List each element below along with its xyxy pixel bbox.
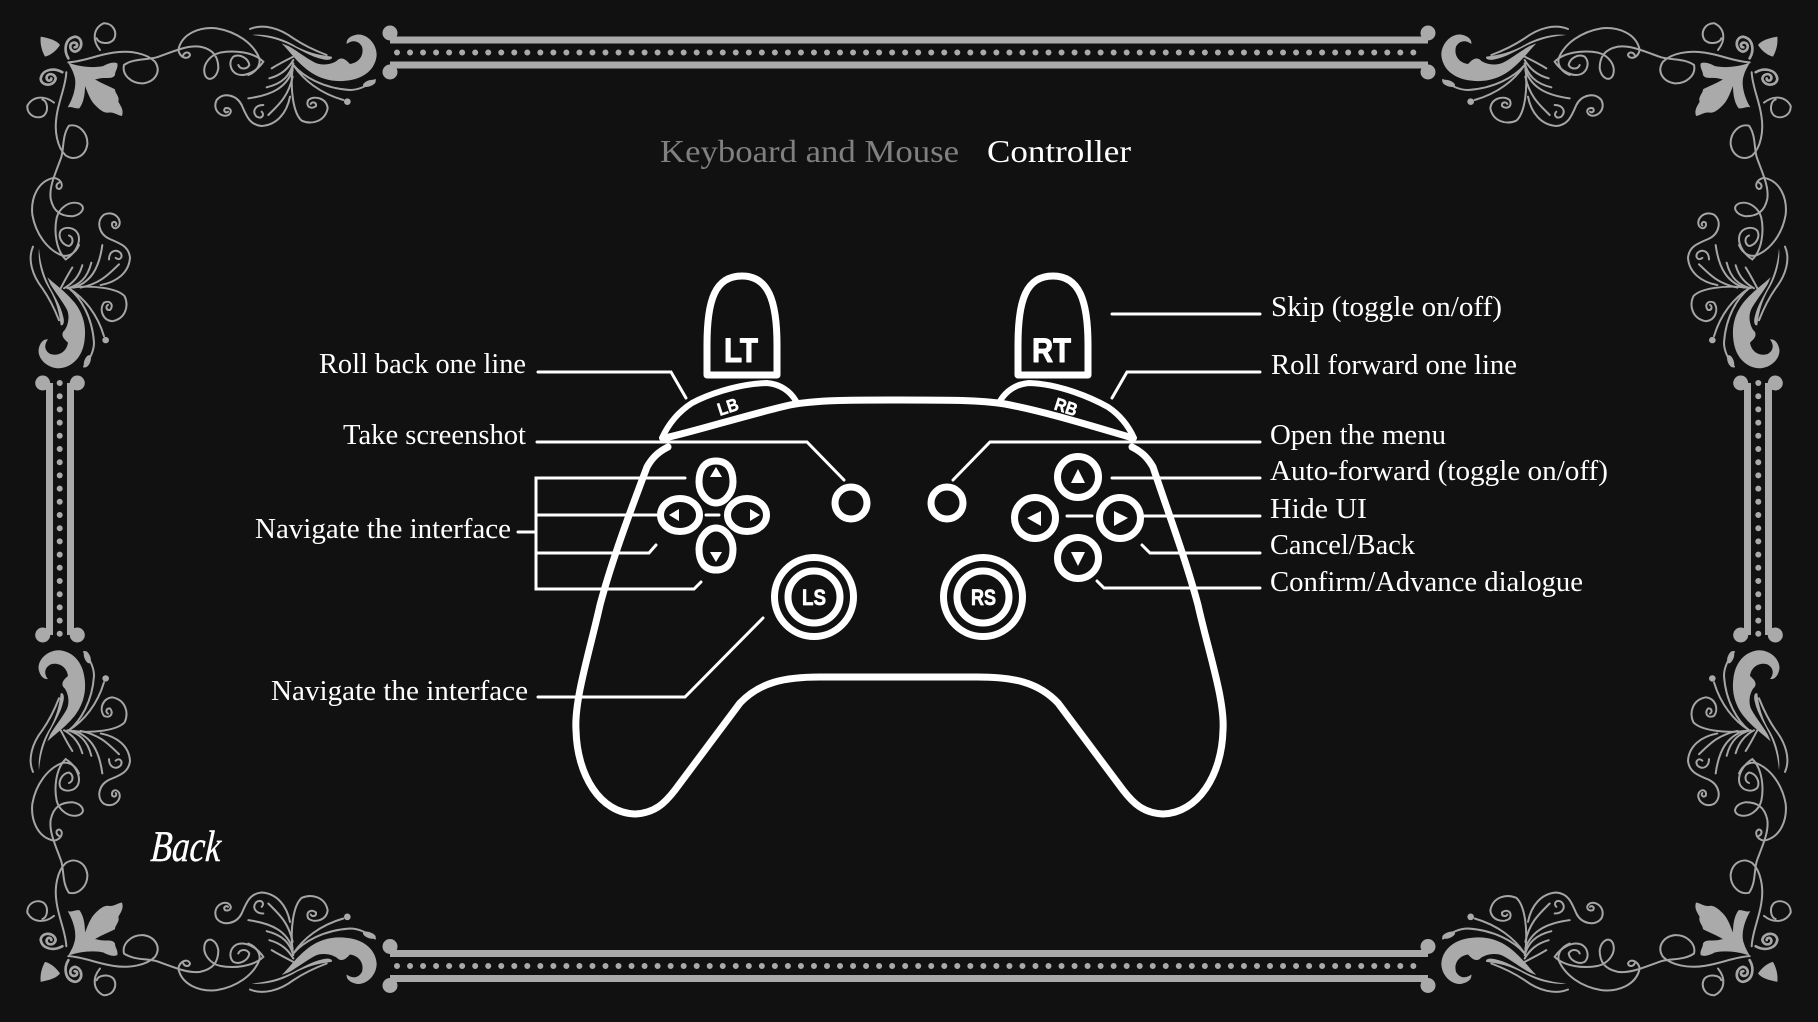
right bumper RB: RB <box>1052 394 1080 420</box>
right stick RS <box>944 558 1022 636</box>
label: Confirm/Advance dialogue: Confirm/Advance dialogue <box>1270 567 1583 598</box>
leader: cancel/back <box>1142 545 1260 553</box>
leader: auto-forward <box>1112 476 1260 480</box>
left bumper LB <box>662 383 796 438</box>
right trigger RT: RT <box>1032 332 1071 370</box>
d-pad down <box>699 528 733 570</box>
label: Cancel/Back: Cancel/Back <box>1270 530 1415 561</box>
label: Take screenshot: Take screenshot <box>343 420 526 451</box>
face button bottom <box>1058 538 1098 578</box>
label: Roll back one line: Roll back one line <box>319 349 526 380</box>
left bumper LB: LB <box>715 394 741 420</box>
face button right <box>1100 498 1140 538</box>
leader: roll back <box>538 372 686 398</box>
corner flourish: top right <box>1441 23 1791 368</box>
leader: left stick <box>538 618 763 697</box>
label: Navigate the interface (d-pad): Navigate the interface <box>255 514 511 545</box>
leader: skip <box>1112 312 1260 316</box>
frame bar: bottom <box>382 939 1436 993</box>
controller diagram <box>576 276 1223 814</box>
leader lines <box>518 314 1260 697</box>
leader: hide UI <box>1067 514 1260 518</box>
controller top edge <box>665 400 1133 438</box>
d-pad left <box>660 498 700 532</box>
frame bar: top <box>382 26 1436 80</box>
screenshot button <box>835 487 867 519</box>
back button: Back <box>149 822 224 871</box>
label: Auto-forward: Auto-forward (toggle on/off) <box>1270 456 1608 487</box>
tab: Controller: Controller <box>987 133 1131 169</box>
face button top <box>1058 456 1098 498</box>
label: Roll forward one line: Roll forward one line <box>1271 350 1517 381</box>
leader: navigate bracket <box>518 478 719 589</box>
leader: roll forward <box>1112 372 1260 398</box>
right bumper RB <box>1000 383 1134 438</box>
leader: confirm <box>1097 581 1260 588</box>
left trigger LT: LT <box>724 332 758 370</box>
left trigger LT <box>707 276 777 375</box>
corner flourish: top left <box>27 23 377 368</box>
leader: open the menu <box>953 442 1260 480</box>
frame bar: left <box>35 376 85 642</box>
label: Skip: Skip (toggle on/off) <box>1271 292 1502 323</box>
label: Hide UI: Hide UI <box>1270 494 1367 525</box>
label: Open the menu: Open the menu <box>1270 420 1446 451</box>
right stick RS: RS <box>971 585 996 610</box>
corner flourish: bottom left <box>27 650 377 995</box>
left stick LS <box>774 558 854 636</box>
d-pad right <box>728 498 766 532</box>
face button left <box>1014 498 1056 538</box>
controller body <box>576 447 1223 814</box>
left stick LS: LS <box>802 585 826 610</box>
corner flourish: bottom right <box>1441 650 1791 995</box>
label: Navigate the interface (stick): Navigate the interface <box>271 676 528 707</box>
d-pad up <box>699 461 733 503</box>
tab: Keyboard and Mouse: Keyboard and Mouse <box>660 133 959 169</box>
leader: take screenshot <box>537 442 844 480</box>
frame bar: right <box>1733 376 1783 642</box>
right trigger RT <box>1018 276 1088 375</box>
menu button <box>931 487 963 519</box>
